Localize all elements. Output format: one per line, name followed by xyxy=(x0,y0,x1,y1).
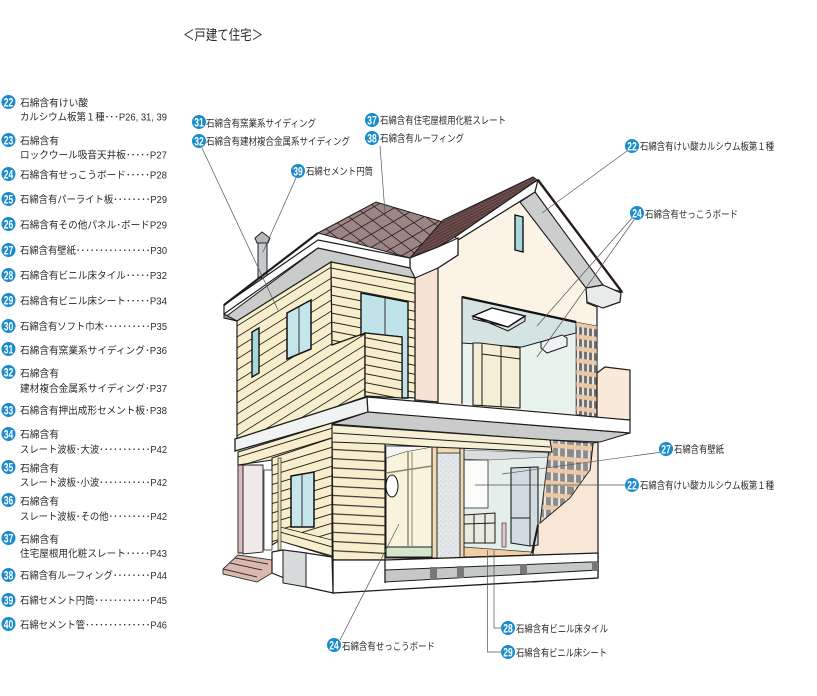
callout 32: 32 xyxy=(194,134,204,148)
legend item 31 xyxy=(2,342,167,357)
callout 29: 29 xyxy=(503,645,513,659)
legend item 33: 33 xyxy=(4,403,13,417)
callout 27: 27 xyxy=(661,442,671,456)
dark roof strip xyxy=(410,177,537,258)
left fascia xyxy=(224,240,410,314)
balcony parapet right xyxy=(597,367,630,420)
legend item 27: 27 xyxy=(4,243,13,257)
upper front wall siding xyxy=(331,262,415,398)
gable wall xyxy=(415,192,603,420)
legend item 26: 石綿含有その他パネル･ボードP29 xyxy=(20,218,167,232)
callout 22 lower: 石綿含有けい酸カルシウム板第１種 xyxy=(640,479,774,492)
upper room opening xyxy=(462,297,597,418)
refrigerator xyxy=(511,467,538,546)
upper sliding window xyxy=(361,293,408,398)
legend item 35: 石綿含有 xyxy=(20,462,59,475)
cream beam xyxy=(332,425,552,452)
balcony front wall xyxy=(365,333,402,398)
legend item 40: 石綿セメント管･･････････････P46 xyxy=(20,618,167,632)
callout 28 xyxy=(501,621,608,636)
japanese room xyxy=(386,446,432,558)
legend item 25: 石綿含有パーライト板････････P29 xyxy=(20,193,167,206)
gable window xyxy=(515,215,523,252)
callout 24 upper: 石綿含有せっこうボード xyxy=(645,208,738,221)
cabinets xyxy=(464,513,495,543)
legend item 34: スレート波板･大波･･･････････P42 xyxy=(20,443,167,456)
legend item 40: 40 xyxy=(4,617,13,631)
small left window xyxy=(252,328,259,377)
callout 39: 39 xyxy=(293,164,303,178)
ceiling lamp xyxy=(473,308,525,331)
legend item 38 xyxy=(2,568,167,582)
callout 22 upper: 22 xyxy=(627,139,637,153)
legend item 32: 石綿含有 xyxy=(20,367,59,380)
legend item 32 xyxy=(2,365,167,395)
legend: material list xyxy=(2,95,167,632)
legend item 36: 石綿含有 xyxy=(20,495,59,508)
left soffit xyxy=(224,248,415,321)
legend item 23: 23 xyxy=(4,133,13,147)
room ceiling xyxy=(462,297,576,347)
callout 32: 石綿含有建材複合金属系サイディング xyxy=(206,135,350,148)
legend item 34 xyxy=(2,427,167,456)
callout 37: 37 xyxy=(367,113,377,127)
legend item 34: 石綿含有 xyxy=(20,428,59,441)
white fascia left of gable xyxy=(455,180,538,240)
callout 31 xyxy=(192,115,316,130)
legend item 23: ロックウール吸音天井板･････P27 xyxy=(20,148,167,162)
outdoor unit xyxy=(283,550,306,587)
callout 29 xyxy=(501,645,607,660)
callout 37: 石綿含有住宅屋根用化粧スレート xyxy=(380,114,506,127)
callout 22 lower xyxy=(625,478,774,492)
entry steps xyxy=(223,555,272,582)
peach side wall xyxy=(415,268,438,402)
legend item 35 xyxy=(2,460,167,489)
room wall xyxy=(462,297,576,414)
closet xyxy=(473,343,520,408)
callout 22 lower: 22 xyxy=(627,478,637,492)
title: ＜戸建て住宅＞ xyxy=(183,27,263,43)
gable fascia xyxy=(535,180,622,292)
legend item 25: 25 xyxy=(4,192,13,206)
legend item 22: 石綿含有けい酸 xyxy=(20,96,88,110)
legend item 36: スレート波板･その他･････････P42 xyxy=(20,510,167,523)
callout 29: 石綿含有ビニル床シート xyxy=(516,646,607,660)
kitchen back wall xyxy=(464,460,488,508)
legend item 31: 石綿含有窯業系サイディング･P36 xyxy=(20,344,167,357)
roof xyxy=(318,202,443,258)
legend item 32: 建材複合金属系サイディング･P37 xyxy=(20,382,167,395)
legend item 26 xyxy=(2,217,167,232)
gable soffit xyxy=(520,192,603,288)
downpipe xyxy=(278,458,281,550)
legend item 37: 住宅屋根用化粧スレート･････P43 xyxy=(20,547,167,560)
callout 38: 石綿含有ルーフィング xyxy=(380,132,464,145)
callout 39 xyxy=(291,164,373,178)
callout 24 upper: 24 xyxy=(632,206,642,220)
legend item 28: 石綿含有ビニル床タイル･････P32 xyxy=(20,269,167,282)
callout 31: 31 xyxy=(194,115,204,129)
callout 22 upper xyxy=(625,139,774,153)
lower left siding upper band xyxy=(238,423,332,465)
exposed brick xyxy=(540,440,593,523)
brick edge xyxy=(576,322,597,418)
legend item 23: 石綿含有 xyxy=(20,134,59,148)
legend item 29 xyxy=(2,293,167,308)
legend item 22: 22 xyxy=(4,95,13,109)
entry porch xyxy=(238,465,272,554)
legend item 36: 36 xyxy=(4,493,13,507)
legend item 33: 石綿含有押出成形セメント板･P38 xyxy=(20,404,167,417)
callout 22 upper: 石綿含有けい酸カルシウム板第１種 xyxy=(640,140,774,153)
legend item 32: 32 xyxy=(4,365,13,379)
callout 27: 石綿含有壁紙 xyxy=(674,443,724,456)
legend item 30: 30 xyxy=(4,319,13,333)
lower right wall xyxy=(533,442,598,582)
fire extinguisher xyxy=(502,523,506,547)
callout 38 xyxy=(365,131,464,145)
upper left wall siding xyxy=(237,262,365,441)
legend item 27 xyxy=(2,243,167,257)
gable return box xyxy=(586,285,621,308)
legend item 36 xyxy=(2,493,167,523)
foundation xyxy=(333,553,598,593)
legend item 40 xyxy=(2,617,167,632)
callout 28: 石綿含有ビニル床タイル xyxy=(516,622,608,636)
legend item 22: カルシウム板第１種･･･P26, 31, 39 xyxy=(20,110,167,124)
upper left window xyxy=(287,300,311,359)
legend item 23 xyxy=(2,133,167,162)
legend item 39: 石綿セメント円筒････････････P45 xyxy=(20,594,167,607)
lower front wall siding xyxy=(332,425,385,560)
foundation left xyxy=(272,550,333,593)
vinyl floor xyxy=(463,547,532,557)
legend item 37: 37 xyxy=(4,531,13,545)
legend item 28: 28 xyxy=(4,268,13,282)
leader lines xyxy=(202,146,662,652)
callout 39: 石綿セメント円筒 xyxy=(306,165,373,178)
callout 37 xyxy=(365,113,506,127)
legend item 39 xyxy=(2,593,167,607)
callout 24 upper xyxy=(630,206,738,221)
legend item 37: 石綿含有 xyxy=(20,533,59,546)
legend item 31: 31 xyxy=(4,342,13,356)
lower interior xyxy=(432,440,593,558)
legend item 30: 石綿含有ソフト巾木･･････････P35 xyxy=(20,320,167,333)
callout 24 lower xyxy=(327,638,435,653)
legend item 24: 石綿含有せっこうボード･････P28 xyxy=(20,168,167,182)
callout 24 lower: 24 xyxy=(329,638,339,652)
lower left window xyxy=(291,472,314,527)
chimney xyxy=(255,232,270,278)
pebble panel and posts xyxy=(437,453,460,558)
left return box xyxy=(410,238,458,278)
legend item 33 xyxy=(2,403,167,417)
callout 38: 38 xyxy=(367,131,377,145)
legend item 38: 38 xyxy=(4,568,13,582)
callout 28: 28 xyxy=(503,621,513,635)
legend item 35: 35 xyxy=(4,460,13,474)
legend item 35: スレート波板･小波･･･････････P42 xyxy=(20,476,167,489)
callout 27 xyxy=(659,442,724,456)
legend item 30 xyxy=(2,319,167,333)
legend item 24 xyxy=(2,167,167,182)
legend item 24: 24 xyxy=(4,167,13,181)
legend item 22 xyxy=(2,95,167,124)
air conditioner xyxy=(541,335,567,353)
legend item 29: 29 xyxy=(4,293,13,307)
house illustration xyxy=(223,177,630,593)
callout 24 lower: 石綿含有せっこうボード xyxy=(342,640,435,653)
legend item 37 xyxy=(2,531,167,560)
legend item 34: 34 xyxy=(4,427,13,441)
lower left wall siding xyxy=(272,438,332,557)
siding below window xyxy=(280,527,332,557)
legend item 38: 石綿含有ルーフィング････････P44 xyxy=(20,569,167,582)
legend item 25 xyxy=(2,192,167,206)
legend item 39: 39 xyxy=(4,593,13,607)
legend item 28 xyxy=(2,268,167,282)
legend item 27: 石綿含有壁紙････････････････P30 xyxy=(20,244,167,257)
legend item 29: 石綿含有ビニル床シート･････P34 xyxy=(20,294,167,308)
legend item 26: 26 xyxy=(4,217,13,231)
balcony slab xyxy=(235,397,630,451)
callout 32 xyxy=(192,134,350,148)
callout 31: 石綿含有窯業系サイディング xyxy=(206,117,316,130)
